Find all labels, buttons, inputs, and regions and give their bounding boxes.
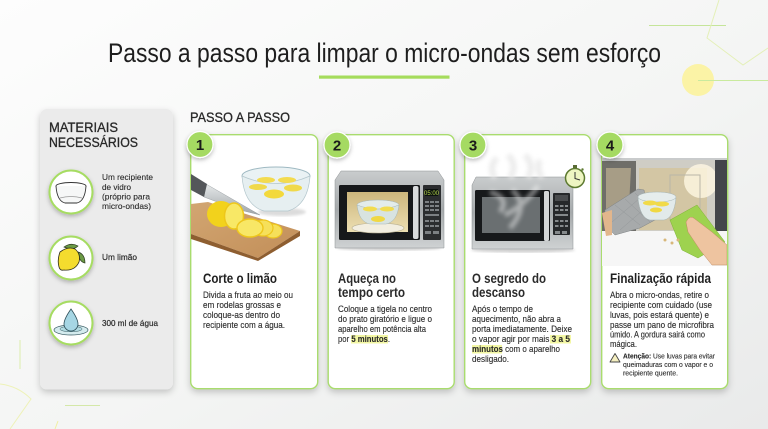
illustration: lemon on cutting board <box>191 167 310 261</box>
step 2 text: por 5 minutos. <box>338 334 390 344</box>
step 4 text: úmido. A gordura sairá como <box>610 330 705 340</box>
step 4 text: luvas, pois estará quente) e <box>610 310 709 320</box>
step 3 text: aquecimento, não abra a <box>472 314 561 324</box>
badge 3 <box>460 132 486 158</box>
step 3 heading: descanso <box>472 284 525 300</box>
highlight: 5 minutos <box>351 335 388 344</box>
text: recipiente <box>102 172 153 211</box>
text: recipiente: Um recipiente <box>102 172 153 182</box>
step 3 text: o vapor agir por mais 3 a 5 <box>472 334 570 344</box>
warning text <box>623 354 716 378</box>
panel heading <box>49 119 138 150</box>
step 1 text: Divida a fruta ao meio ou <box>203 290 293 300</box>
step 1 heading: Corte o limão <box>203 270 277 286</box>
warning text: Atenção: Use luvas para evitar <box>623 354 716 360</box>
step 2 text: do prato giratório e ligue o <box>338 314 432 324</box>
step 4 text: passe um pano de microfibra <box>610 320 714 330</box>
panel: step 3 <box>460 132 591 389</box>
section heading: PASSO A PASSO <box>190 110 290 125</box>
illustration: gloved hand and cloth at open microwave <box>602 158 728 266</box>
step 3 heading <box>472 270 546 300</box>
step 3 text: Após o tempo de <box>472 304 533 314</box>
step 1 text <box>203 290 293 330</box>
illustration: microwave heating bowl <box>335 171 444 250</box>
icon: stopwatch <box>566 165 584 188</box>
step 1 text: em rodelas grossas e <box>203 300 281 310</box>
step 4 text <box>610 290 714 349</box>
panel: step 1 <box>187 132 318 389</box>
step 2 heading: Aqueça no <box>338 270 396 286</box>
step 3 text: porta imediatamente. Deixe <box>472 324 572 334</box>
text: limão: Um limão <box>102 252 137 262</box>
title: Passo a passo para limpar o micro-ondas sem esforço <box>108 38 661 68</box>
text: recipiente: micro-ondas) <box>102 201 151 211</box>
illustration: microwave heating bowl: 05:00 <box>424 191 440 197</box>
text: água: 300 ml de água <box>102 318 158 328</box>
icon: water drop <box>50 302 92 344</box>
step 2 text: aparelho em potência alta <box>338 324 426 334</box>
icon: lemon <box>50 236 92 280</box>
step 2 heading: tempo certo <box>338 284 405 300</box>
step 3 text: desligado. <box>472 354 509 364</box>
title underline <box>319 76 450 79</box>
panel: step 4 <box>597 132 728 389</box>
badge 1 <box>187 132 213 158</box>
badge 1: 1 <box>196 137 204 154</box>
illustration: microwave with steam and timer <box>471 155 575 252</box>
step 3 heading: O segredo do <box>472 270 546 286</box>
step 4 text: mágica. <box>610 339 637 349</box>
step 4 text: recipiente com cuidado (use <box>610 300 712 310</box>
badge 2: 2 <box>333 138 341 154</box>
panel: materiais necessários <box>40 109 173 390</box>
icon: glass bowl <box>50 170 92 214</box>
badge 4 <box>597 132 623 158</box>
warning text: recipiente quente. <box>623 370 678 378</box>
step 2 heading <box>338 270 405 300</box>
panel: step 2 <box>324 132 454 389</box>
step 4 text: Abra o micro-ondas, retire o <box>610 290 709 300</box>
step 3 text <box>472 304 572 364</box>
badge 4: 4 <box>606 138 615 154</box>
panel heading: NECESSÁRIOS <box>49 134 138 150</box>
step 1 text: coloque-as dentro do <box>203 310 280 320</box>
warning text: queimaduras com o vapor e o <box>623 362 713 369</box>
badge 2 <box>324 132 350 158</box>
step 4 heading: Finalização rápida <box>610 270 711 286</box>
text: recipiente: de vidro <box>102 182 131 192</box>
panel heading: MATERIAIS <box>49 119 118 135</box>
icon: warning <box>610 354 620 362</box>
step 2 text <box>338 304 432 344</box>
step 1 text: recipiente com a água. <box>203 320 285 330</box>
highlights: 3 a 5 minutos <box>472 335 571 354</box>
step 2 text: Coloque a tigela no centro <box>338 304 432 314</box>
step 3 text: minutos com o aparelho <box>472 344 560 354</box>
text: recipiente: (próprio para <box>102 192 150 202</box>
badge 3: 3 <box>469 138 477 154</box>
